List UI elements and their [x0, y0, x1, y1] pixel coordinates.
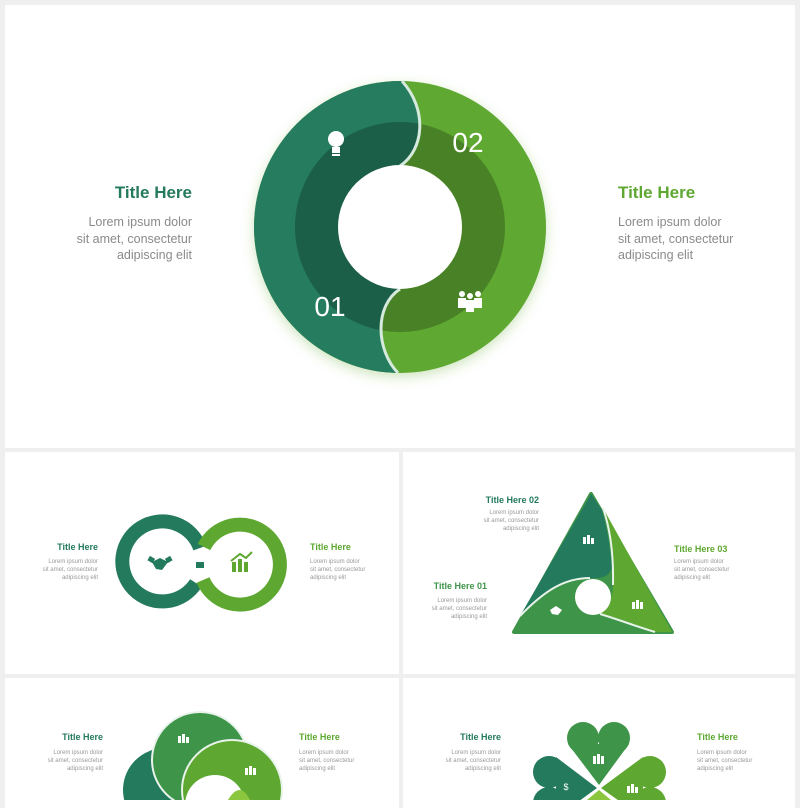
- chart: clover: [533, 722, 666, 808]
- chart: main ring: sit amet, consectetur: [310, 567, 365, 573]
- chart: main ring: sit amet, consectetur: [446, 758, 501, 764]
- icon: people: [632, 600, 643, 609]
- title: rings left: Title Here: [62, 732, 103, 742]
- chart: main ring: Lorem ipsum dolor: [489, 510, 539, 516]
- chart: main ring: Lorem ipsum dolor: [48, 559, 98, 565]
- chart: main ring: sit amet, consectetur: [43, 567, 98, 573]
- chart: overlapping rings: [123, 712, 282, 808]
- panel: infinity: [5, 452, 399, 674]
- chart: main ring: [42, 78, 752, 800]
- icon: people: [245, 766, 256, 775]
- title: clover left: Title Here: [460, 732, 501, 742]
- icon: chart: [178, 734, 189, 743]
- title: infinity left: Title Here: [57, 542, 98, 552]
- chart: main ring: sit amet, consectetur: [432, 606, 487, 612]
- text: top left: [77, 215, 192, 262]
- chart: infinity: [122, 521, 280, 605]
- chart: main ring: adipiscing elit: [503, 526, 539, 532]
- chart: main ring: adipiscing elit: [451, 614, 487, 620]
- text: top right: sit amet, consectetur: [618, 232, 733, 246]
- title: rings right: Title Here: [299, 732, 340, 742]
- chart: triangle: [514, 494, 672, 632]
- text: top left: adipiscing elit: [117, 248, 192, 262]
- title: triangle 01: Title Here 01: [434, 581, 487, 591]
- panel: clover: [403, 678, 795, 808]
- chart: main ring: adipiscing elit: [465, 766, 501, 772]
- chart: main ring: sit amet, consectetur: [299, 758, 354, 764]
- chart: main ring: sit amet, consectetur: [674, 567, 729, 573]
- chart: main ring: sit amet, consectetur: [48, 758, 103, 764]
- chart: main ring: sit amet, consectetur: [697, 758, 752, 764]
- chart: main ring: adipiscing elit: [674, 575, 710, 581]
- icon: handshake: [147, 556, 173, 570]
- panel: top ring: [5, 5, 795, 448]
- label: 02: 02: [452, 127, 484, 158]
- chart: main ring: Lorem ipsum dolor: [437, 598, 487, 604]
- text: top right: Lorem ipsum dolor: [618, 215, 722, 229]
- chart: main ring: Lorem ipsum dolor: [310, 559, 360, 565]
- label: 01: 01: [314, 291, 346, 322]
- icon: people: [458, 291, 482, 312]
- chart: main ring: Lorem ipsum dolor: [53, 750, 103, 756]
- icon: chart: [583, 535, 594, 544]
- chart: main ring: adipiscing elit: [299, 766, 335, 772]
- text: top left: Lorem ipsum dolor: [88, 215, 192, 229]
- chart: main ring: adipiscing elit: [67, 766, 103, 772]
- chart: main ring: Lorem ipsum dolor: [674, 559, 724, 565]
- chart: main ring: Lorem ipsum dolor: [299, 750, 349, 756]
- title: top right: Title Here: [618, 183, 695, 202]
- icon: handshake: [550, 606, 562, 615]
- chart: main ring: adipiscing elit: [62, 575, 98, 581]
- chart: main ring: sit amet, consectetur: [484, 518, 539, 524]
- icon: chart: [627, 784, 638, 793]
- panel: triangle: [403, 452, 795, 674]
- icon: dollar hand: $: [563, 782, 569, 792]
- title: top left: Title Here: [115, 183, 192, 202]
- title: infinity right: Title Here: [310, 542, 351, 552]
- chart: main ring: adipiscing elit: [310, 575, 346, 581]
- title: triangle 02: Title Here 02: [486, 495, 539, 505]
- icon: bulb: [328, 131, 344, 156]
- chart: main ring: Lorem ipsum dolor: [697, 750, 747, 756]
- chart: main ring: Lorem ipsum dolor: [451, 750, 501, 756]
- panel: overlapping rings: [5, 678, 399, 808]
- icon: chart: [231, 552, 252, 572]
- text: top left: sit amet, consectetur: [77, 232, 192, 246]
- icon: people: [593, 754, 604, 764]
- title: triangle 03: Title Here 03: [674, 544, 727, 554]
- text: top right: adipiscing elit: [618, 248, 693, 262]
- title: clover right: Title Here: [697, 732, 738, 742]
- chart: main ring: adipiscing elit: [697, 766, 733, 772]
- text: top right: [618, 215, 734, 262]
